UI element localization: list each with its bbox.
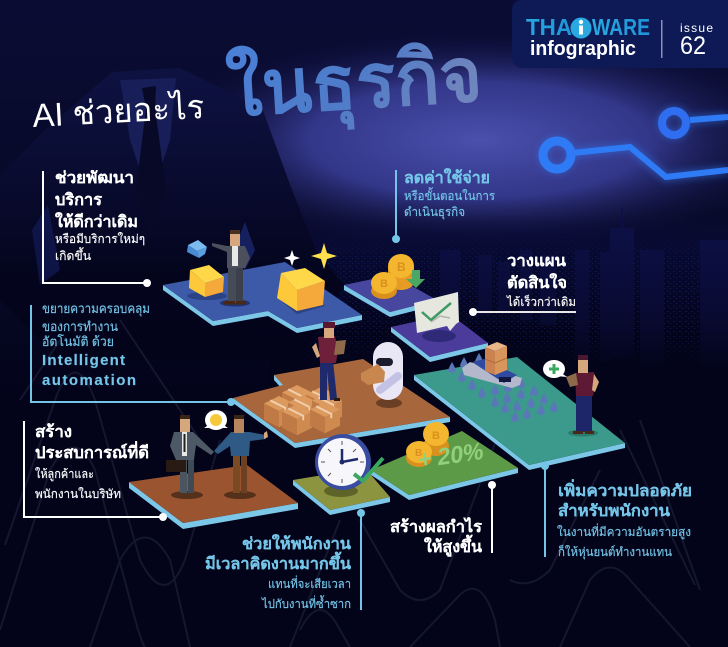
callout: safety: ก็ให้หุ่นยนต์ทำงานแทน (558, 544, 672, 560)
platform: blue service (163, 230, 362, 333)
callout: planning: วางแผน (507, 253, 566, 270)
figure: two men shaking hands (166, 410, 268, 499)
platform: safety teal (414, 342, 625, 470)
callout: planning: ตัดสินใจ (507, 273, 567, 292)
callout: automation: ของการทำงาน (42, 319, 118, 334)
icon: chart card (414, 292, 459, 333)
callout: automation: อัตโนมัติ ด้วย (42, 334, 114, 349)
callout: employee time (205, 509, 365, 611)
callout: profit (390, 481, 496, 558)
icon: conveyor with boxes (462, 342, 522, 388)
icon: coin stacks: B (397, 260, 406, 274)
glowing circuit lines (543, 111, 728, 177)
callout: experience: สร้าง (35, 423, 72, 441)
callout: safety: ในงานที่มีความอันตรายสูง (557, 523, 691, 540)
icon: yellow cube large (277, 268, 325, 314)
callout: cost (392, 168, 496, 243)
figure: delivery worker (312, 322, 346, 401)
icon: sparkles (284, 243, 337, 269)
suit silhouette (0, 68, 345, 360)
platform: chart (391, 292, 488, 362)
callout: planning: ได้เร็วกว่าเดิม (506, 294, 576, 309)
platform: profit green (371, 422, 518, 500)
callout: service (43, 169, 151, 287)
callout: profit: สร้างผลกำไร (390, 517, 482, 536)
icon: coin stacks: B (380, 278, 388, 290)
callout: service: หรือมีบริการใหม่ๆ (55, 232, 145, 246)
callout: service: บริการ (55, 191, 102, 209)
callout: service: เกิดขึ้น (55, 247, 91, 263)
callout: service: ช่วยพัฒนา (55, 169, 134, 187)
platform: warehouse brown (233, 322, 450, 448)
callout: planning (469, 253, 576, 316)
callout: cost: ลดค่าใช้จ่าย (404, 168, 490, 187)
logo badge: infographic (530, 38, 636, 60)
logo badge: 62 (680, 32, 706, 60)
callout: automation: ขยายความครอบคลุม (42, 301, 150, 317)
icon: floating blue cube (187, 240, 207, 258)
wavy background lines (0, 320, 700, 647)
main title: ในธุรกิจ: ในธุรกิจ (224, 31, 485, 138)
callout: service: ให้ดีกว่าเดิม (55, 212, 138, 231)
callout: employee time: ไปกับงานที่ซ้ำซาก (261, 595, 351, 611)
city skyline (302, 208, 728, 359)
platform: coins (344, 254, 437, 317)
icon: spike field (448, 353, 558, 422)
logo badge (512, 0, 728, 68)
icon: stacked boxes (264, 385, 342, 435)
callout: employee time: มีเวลาคิดงานมากขึ้น (205, 551, 351, 573)
callout: cost: หรือขั้นตอนในการ (404, 187, 496, 203)
icon: gold coins: B (432, 430, 440, 442)
icon: coin stacks (371, 254, 425, 299)
callout: automation: automation (42, 372, 136, 389)
icon: gold coins: B (415, 448, 422, 459)
icon: gold coins (406, 422, 449, 467)
callout: automation (31, 301, 235, 406)
callout: cost: ดำเนินธุรกิจ (404, 205, 465, 220)
callout: profit: ให้สูงขึ้น (424, 534, 482, 558)
callout: automation: Intelligent (42, 352, 125, 369)
icon: yellow cube small (187, 265, 227, 300)
main title: AI ช่วยอะไร: AI ช่วยอะไร (31, 88, 205, 134)
figure: worker with bubble (543, 355, 599, 436)
callout: experience: ประสบการณ์ที่ดี (35, 441, 149, 462)
text: +20%: + 20% (416, 438, 485, 474)
callout: experience: ให้ลูกค้าและ (35, 467, 94, 482)
callout: employee time: ช่วยให้พนักงาน (242, 534, 351, 553)
figure: businessman (212, 230, 250, 306)
callout: safety (541, 462, 692, 560)
logo badge: WARE (592, 14, 650, 40)
figure: robot carrying box (361, 342, 403, 408)
callout: safety: สำหรับพนักงาน (558, 502, 670, 520)
icon: clock with check (315, 434, 383, 490)
platform: time olive (293, 434, 390, 515)
callout: employee time: แทนที่จะเสียเวลา (268, 575, 351, 591)
logo badge: issue (680, 21, 713, 35)
callout: safety: เพิ่มความปลอดภัย (558, 479, 692, 500)
logo badge: THA (526, 14, 572, 40)
callout: experience (24, 421, 167, 521)
callout: experience: พนักงานในบริษัท (35, 487, 121, 501)
platform: handshake brown (129, 410, 298, 529)
